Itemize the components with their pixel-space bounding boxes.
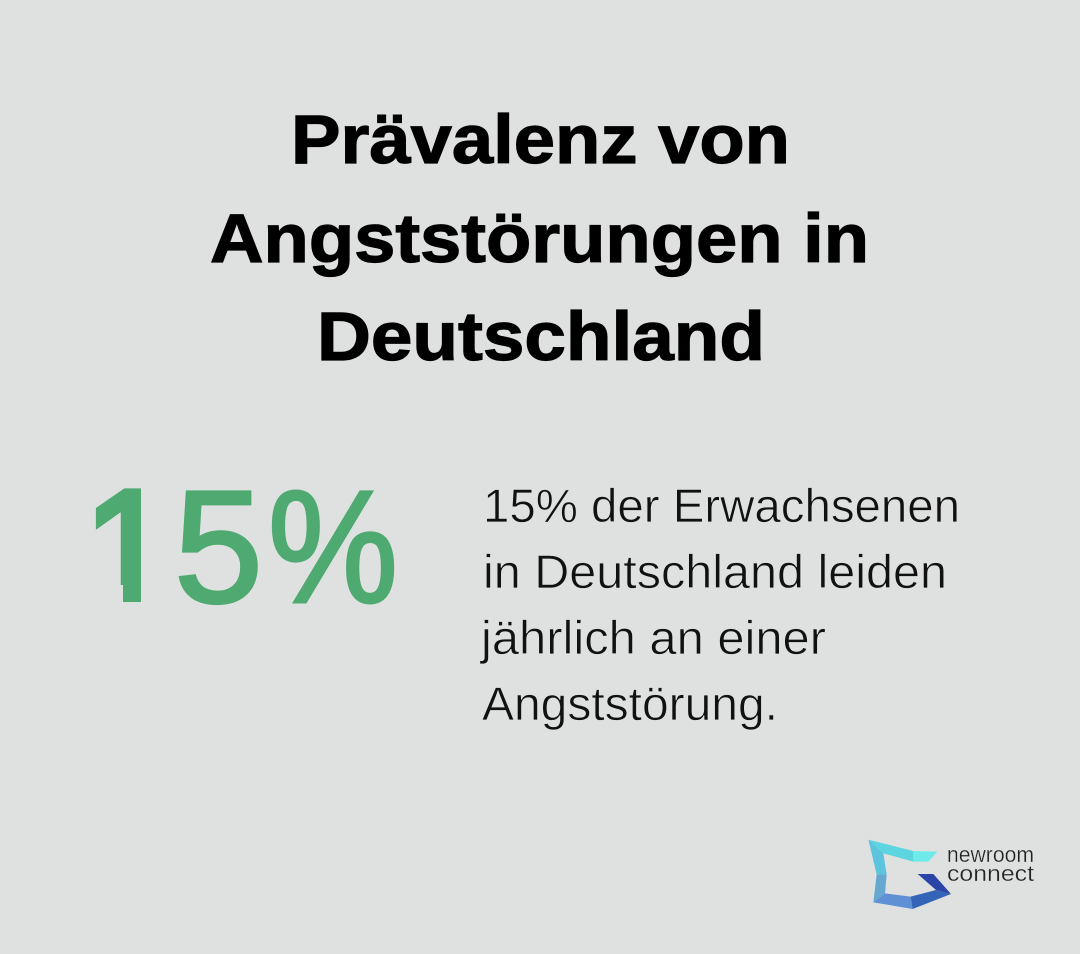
title: Angststörungen in xyxy=(210,200,869,277)
logo wordmark xyxy=(947,842,1034,886)
icon: logo mark xyxy=(868,840,951,909)
description text: in Deutschland leiden xyxy=(483,545,947,598)
big statistic: 15%: 1 xyxy=(84,457,173,636)
description text: jährlich an einer xyxy=(479,611,826,664)
big statistic: 15%: % xyxy=(268,457,398,636)
big statistic: 15%: 5 xyxy=(174,457,263,636)
logo wordmark: connect xyxy=(947,861,1034,886)
description text: 15% der Erwachsenen xyxy=(483,479,960,532)
logo wordmark: newroom xyxy=(947,842,1034,867)
title xyxy=(210,101,869,375)
description text xyxy=(479,479,960,730)
title: Prävalenz von xyxy=(291,101,790,178)
logo: newroom connect xyxy=(868,840,1034,909)
big statistic: 15% xyxy=(96,488,394,606)
description text: Angststörung. xyxy=(482,677,778,730)
title: Deutschland xyxy=(317,298,765,375)
